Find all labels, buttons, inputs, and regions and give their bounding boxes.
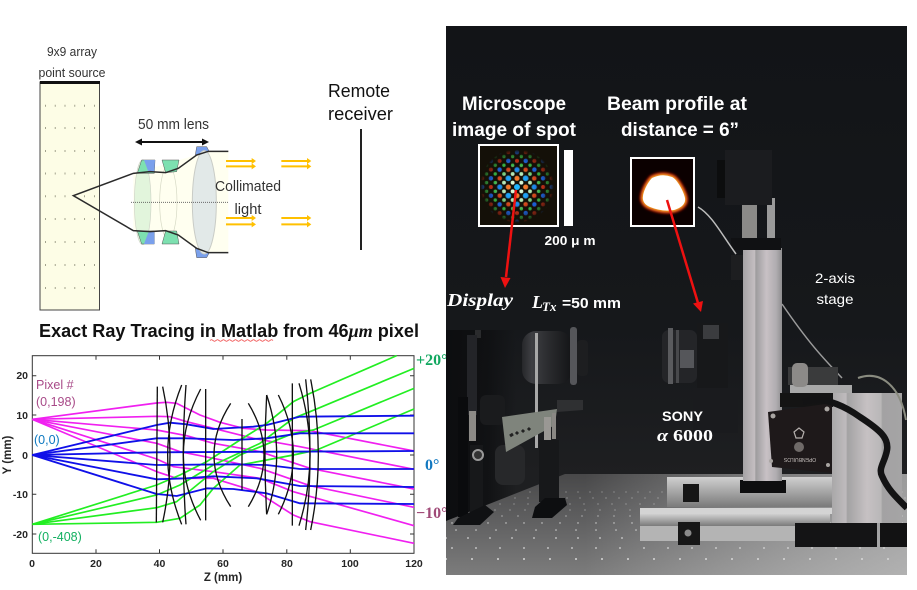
series labels: (0,0) <box>34 433 60 447</box>
remote receiver line <box>360 129 362 250</box>
label: display: Display <box>446 290 514 310</box>
label: lens focal length: =50 mm <box>562 295 621 312</box>
red arrow to camera <box>667 200 703 312</box>
heading: beam profile <box>608 96 747 136</box>
blue rays <box>32 416 414 504</box>
label: 2-axis stage: stage <box>816 291 854 307</box>
label: 2-axis stage <box>816 273 854 307</box>
angle labels: −10° <box>416 505 448 522</box>
label: remote receiver: receiver <box>328 104 393 124</box>
label: sony alpha 6000 <box>657 412 712 441</box>
magenta rays <box>32 402 414 543</box>
heading: beam profile: distance = 6” <box>621 120 739 141</box>
axis tick labels: 10 <box>16 410 28 422</box>
label: collimated light: light <box>234 201 262 218</box>
series labels: Pixel # <box>36 378 74 392</box>
dimension arrow: 50 mm lens: 50 mm lens <box>138 117 209 133</box>
label: lens focal length <box>532 296 620 311</box>
scale bar with 200 micron label: 200 μ m <box>544 234 596 248</box>
axis tick labels: 60 <box>217 558 229 570</box>
panel: lens schematic <box>38 44 393 310</box>
collimated light arrows <box>226 158 311 227</box>
label: lens focal length: L <box>531 292 543 312</box>
vertical stage column <box>698 150 842 481</box>
chart: ray tracing plot <box>2 352 448 584</box>
plot frame and ticks <box>32 356 414 553</box>
heading: microscope image of spot: Microscope <box>462 94 566 115</box>
green rays <box>32 356 414 524</box>
optical table <box>446 474 907 575</box>
label: 9x9 array point source: point source <box>38 65 106 80</box>
microscope spot image <box>479 145 558 226</box>
axis tick labels: 0 <box>22 450 28 462</box>
point source array panel <box>40 81 100 310</box>
label: 9x9 array point source <box>38 44 106 80</box>
axis tick labels <box>13 370 423 570</box>
angle labels <box>416 352 448 522</box>
axis tick labels: -10 <box>13 489 28 501</box>
lens assembly with light path <box>73 147 228 258</box>
label: sony alpha 6000: SONY <box>662 408 704 424</box>
rays and lens surfaces <box>32 356 414 543</box>
label: collimated light: Collimated <box>215 178 281 195</box>
horizontal stage motor and housing <box>768 363 907 547</box>
label: remote receiver: Remote <box>328 81 390 101</box>
axis tick labels: 20 <box>90 558 102 570</box>
axis tick labels: 80 <box>281 558 293 570</box>
display mount post <box>453 330 525 525</box>
sony camera <box>662 325 719 384</box>
label: 2-axis stage: 2-axis <box>815 270 855 286</box>
axis titles: Z (mm) <box>204 572 242 584</box>
transmitter lens on post <box>502 327 588 518</box>
horizontal stage motor and housing: OPENBUILDS <box>783 456 816 462</box>
axis titles: Y (mm) <box>2 435 14 474</box>
heading: microscope image of spot <box>452 94 577 141</box>
label: lens focal length: Tx <box>542 299 557 314</box>
series labels: (0,-408) <box>38 530 82 544</box>
label: remote receiver <box>328 81 393 124</box>
axis tick labels: -20 <box>13 529 28 541</box>
lens surfaces <box>156 379 318 530</box>
label: collimated light <box>215 178 281 218</box>
rail stage base <box>640 477 840 545</box>
axis titles <box>2 435 242 584</box>
heading: exact ray tracing: Exact Ray Tracing in Matlab from 46μm pixel <box>39 321 419 341</box>
angle labels: 0° <box>425 457 439 474</box>
series labels: (0,198) <box>36 395 76 409</box>
axis tick labels: 40 <box>154 558 165 570</box>
scale bar with 200 micron label <box>544 150 596 248</box>
axis tick labels: 20 <box>16 370 28 382</box>
dimension arrow: 50 mm lens <box>135 117 209 146</box>
axis tick labels: 100 <box>341 558 359 570</box>
red arrow to display <box>500 190 516 288</box>
label: 9x9 array point source: 9x9 array <box>47 44 97 59</box>
beam profile image <box>631 158 694 226</box>
label: sony alpha 6000: α 6000 <box>657 426 713 445</box>
panel: lab photograph <box>446 26 907 575</box>
heading: microscope image of spot: image of spot <box>452 120 577 141</box>
axis tick labels: 0 <box>29 558 35 570</box>
angle labels: +20° <box>416 352 448 369</box>
series labels <box>34 378 82 544</box>
axis tick labels: 120 <box>405 558 423 570</box>
heading: beam profile: Beam profile at <box>607 94 748 115</box>
